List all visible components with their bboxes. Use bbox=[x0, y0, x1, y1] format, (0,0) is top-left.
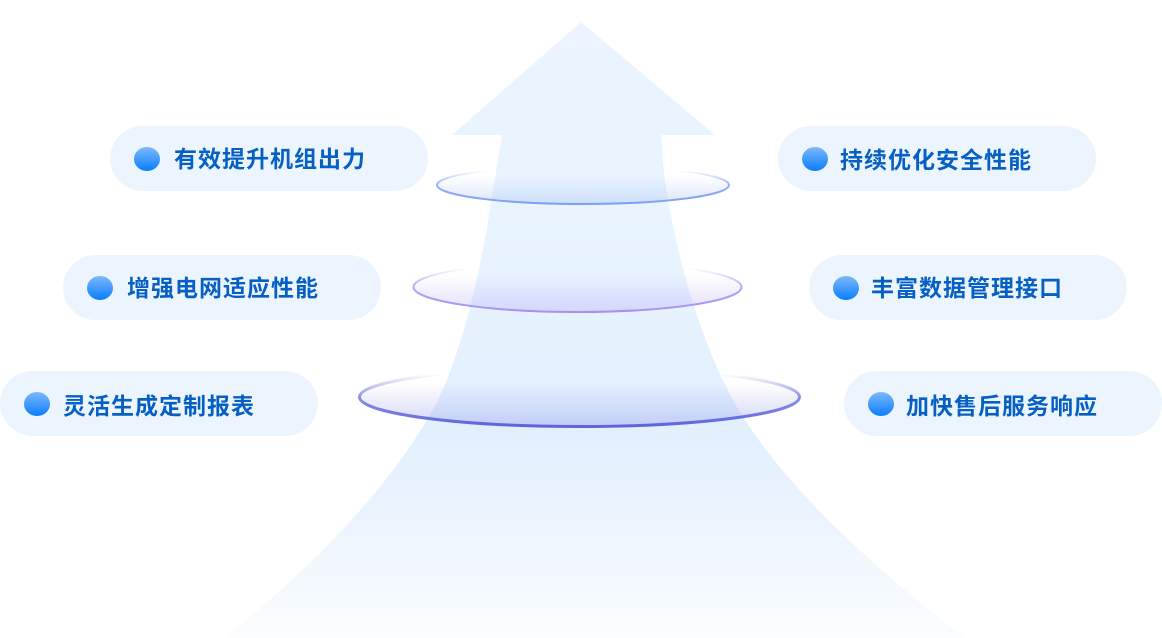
icon: dot bbox=[24, 392, 50, 416]
label: 持续优化安全性能 bbox=[840, 147, 1032, 173]
pill: 持续优化安全性能 bbox=[778, 126, 1096, 191]
pill: 增强电网适应性能 bbox=[63, 255, 381, 320]
icon: dot bbox=[833, 276, 859, 300]
ring: top bbox=[437, 166, 729, 204]
label: 丰富数据管理接口 bbox=[871, 275, 1063, 301]
label: 有效提升机组出力 bbox=[174, 146, 366, 172]
pill: 灵活生成定制报表 bbox=[0, 371, 318, 436]
pill: 加快售后服务响应 bbox=[844, 371, 1162, 436]
icon: dot bbox=[134, 147, 160, 171]
label: 加快售后服务响应 bbox=[906, 393, 1098, 419]
pill: 有效提升机组出力 bbox=[110, 126, 428, 191]
label: 灵活生成定制报表 bbox=[63, 393, 255, 419]
pill: 丰富数据管理接口 bbox=[809, 255, 1127, 320]
icon: dot bbox=[87, 276, 113, 300]
ring: middle bbox=[414, 262, 742, 312]
icon: dot bbox=[802, 147, 828, 171]
ring: bottom bbox=[360, 368, 800, 426]
icon: dot bbox=[868, 392, 894, 416]
arrow bbox=[225, 22, 965, 638]
label: 增强电网适应性能 bbox=[127, 275, 319, 301]
